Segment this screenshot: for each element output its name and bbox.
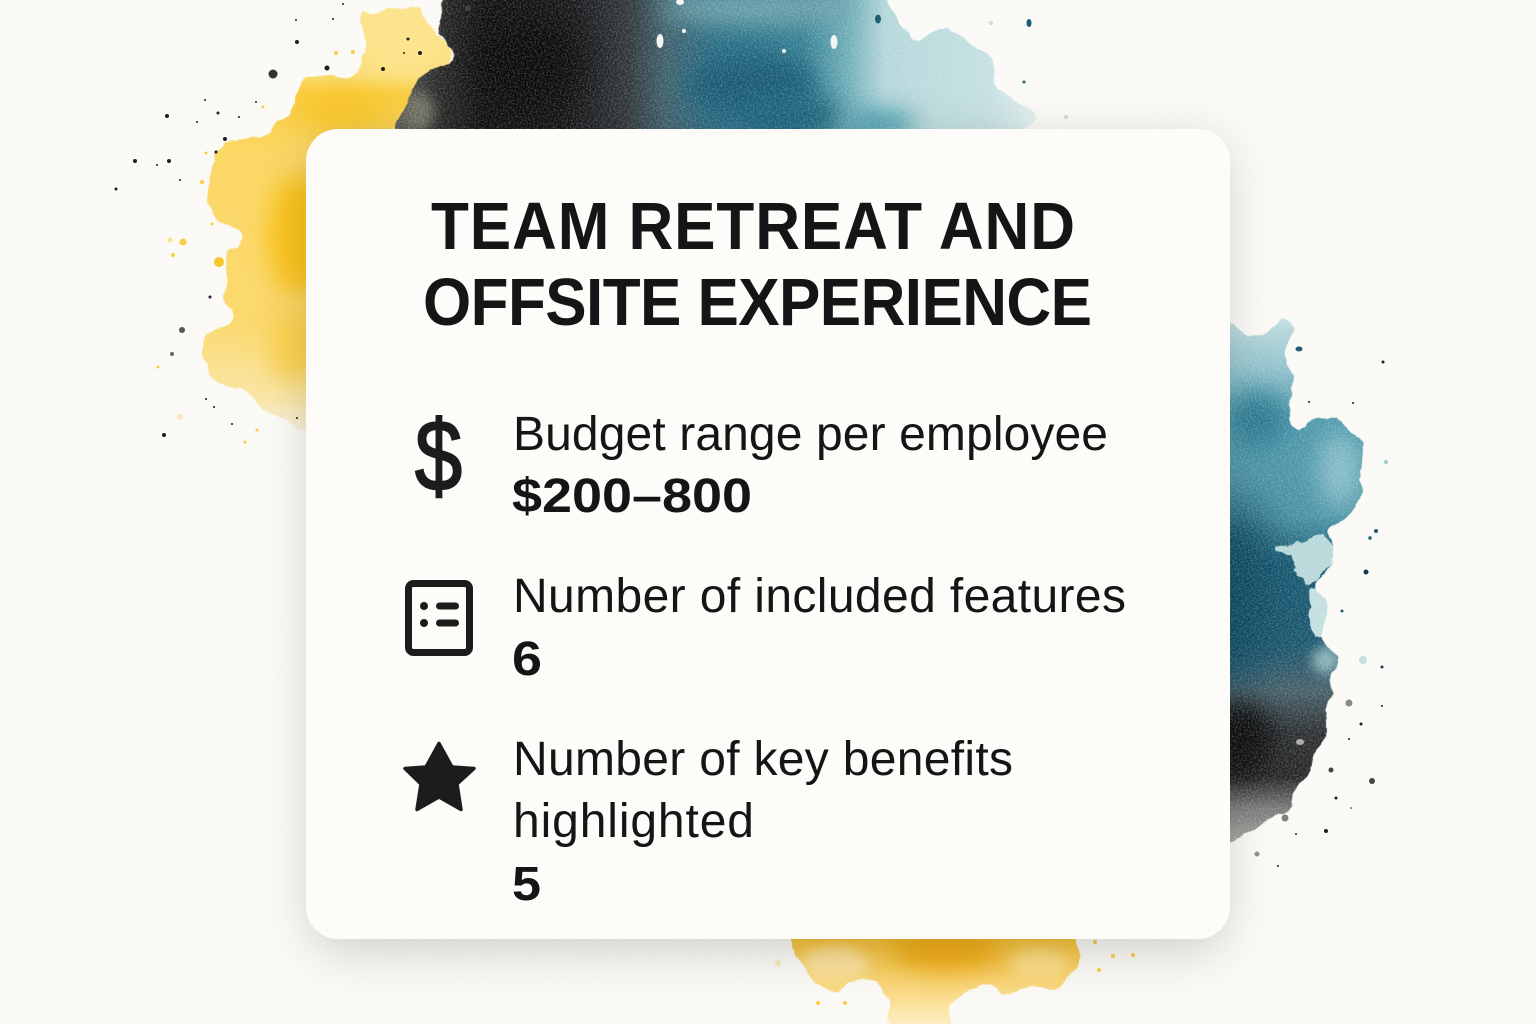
paint spatter: yellow drops — [156, 50, 1135, 1005]
title — [423, 189, 1092, 340]
paper blots in the paint — [656, 0, 1304, 745]
watercolor splash: black to teal top — [394, 0, 1036, 129]
text block: features — [512, 570, 1126, 686]
text block: features: Number of included features — [513, 570, 1126, 623]
text block: budget: $200–800 — [512, 470, 752, 523]
title: TEAM RETREAT AND — [431, 189, 1075, 264]
card shadow — [310, 140, 1226, 952]
text block: budget — [512, 408, 1108, 523]
watercolor splash: yellow bottom — [790, 939, 1080, 1024]
ink spatter: dark dots — [114, 3, 1384, 867]
card panel — [306, 129, 1230, 939]
title: OFFSITE EXPERIENCE — [423, 265, 1092, 340]
icon: checklist — [408, 584, 470, 652]
text block: features: 6 — [512, 633, 542, 686]
icon: star — [405, 744, 474, 810]
text block: benefits: 5 — [512, 858, 541, 911]
text block: budget: Budget range per employee — [513, 408, 1108, 461]
text block: benefits: highlighted — [513, 795, 754, 848]
watercolor splash: yellow left — [201, 6, 452, 431]
text block: benefits — [512, 733, 1013, 911]
text block: benefits: Number of key benefits — [513, 733, 1013, 786]
icon: dollar sign: $ — [415, 399, 462, 512]
paint spatter: teal drops — [875, 14, 1388, 668]
watercolor splash: teal to black right — [1230, 318, 1364, 843]
